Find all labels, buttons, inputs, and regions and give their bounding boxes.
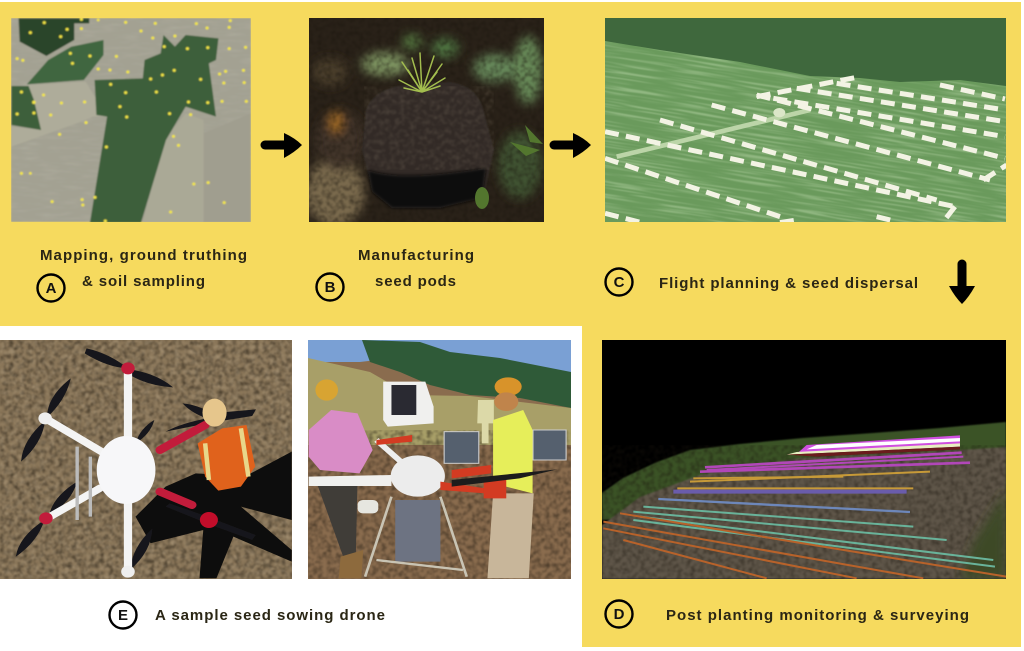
- seed pod soil block: [362, 82, 494, 188]
- panel D: survey point cloud: [602, 340, 1006, 579]
- badge C: [606, 268, 632, 296]
- blurred foliage background: [305, 34, 542, 226]
- woman: [317, 480, 358, 560]
- person with vest: [198, 425, 255, 491]
- panel C: flight plan terrain: [605, 18, 1006, 222]
- label: seed pods: seed pods: [375, 273, 456, 290]
- forest: [362, 340, 571, 408]
- badge B: [316, 274, 344, 300]
- label: & soil sampling: & soil sampling: [82, 273, 205, 290]
- panel B: seed pod photo: [305, 18, 544, 226]
- man: [487, 493, 534, 578]
- propellers: [16, 348, 256, 570]
- cases: [444, 432, 479, 463]
- arrow: C to D: [958, 264, 966, 287]
- dark sky region: [605, 18, 1006, 86]
- arrow head: C to D: [949, 286, 975, 304]
- panel E left: top view of drone: [0, 340, 292, 579]
- arrow head: A to B: [284, 133, 302, 158]
- badge B: B: [325, 279, 336, 296]
- panel A: mapping image: [11, 18, 251, 223]
- label: Manufacturing: Manufacturing: [358, 247, 474, 264]
- badge E: [110, 602, 136, 628]
- arrow: B to C: [554, 140, 575, 150]
- badge A: A: [46, 280, 57, 297]
- tree line: [602, 422, 1006, 520]
- background: white panel for drone photos: [0, 326, 581, 651]
- survey lines: [603, 435, 1006, 578]
- flight lines: [605, 77, 1007, 223]
- arrow head: B to C: [573, 133, 591, 158]
- label: Flight planning & seed dispersal: Flight planning & seed dispersal: [659, 275, 918, 292]
- sky: [308, 340, 571, 375]
- arms: [45, 372, 128, 572]
- seedling: [399, 53, 445, 92]
- background person: [477, 400, 494, 443]
- badge E: E: [118, 607, 128, 624]
- badge D: D: [614, 606, 625, 623]
- van: [383, 382, 434, 427]
- ground: [602, 447, 1006, 579]
- crate and frame: [395, 500, 440, 562]
- badge D: [606, 600, 632, 628]
- panel E right: crew holding drone: [308, 340, 571, 579]
- label: A sample seed sowing drone: A sample seed sowing drone: [155, 607, 385, 624]
- drone body and arms: [309, 475, 391, 486]
- label: Mapping, ground truthing: Mapping, ground truthing: [40, 247, 247, 264]
- badge A: [38, 274, 64, 302]
- leaves lower right: [475, 125, 543, 209]
- shadow: [136, 452, 292, 578]
- arrow: A to B: [265, 140, 286, 150]
- label: Post planting monitoring & surveying: Post planting monitoring & surveying: [666, 607, 969, 624]
- badge C: C: [614, 274, 625, 291]
